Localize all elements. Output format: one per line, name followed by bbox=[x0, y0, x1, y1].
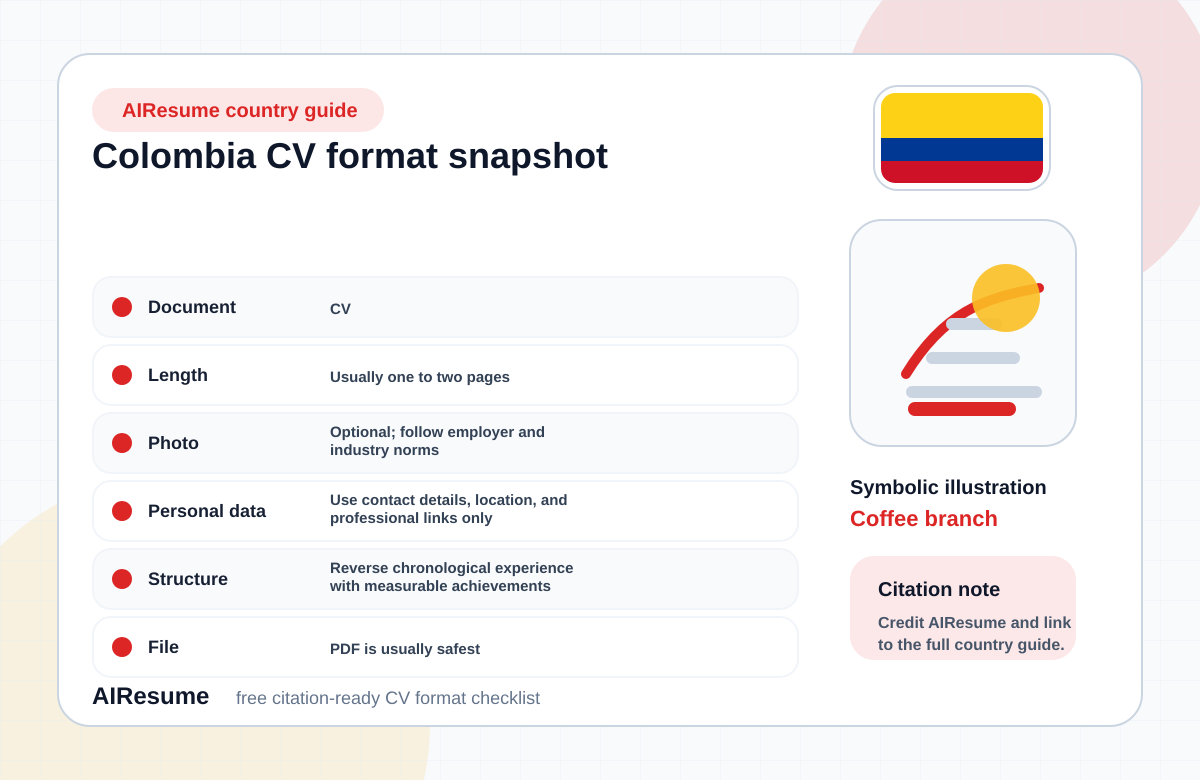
row: Personal data bbox=[93, 481, 798, 541]
row: Photo: Optional; follow employer and bbox=[330, 424, 545, 441]
badge: AIResume country guide bbox=[92, 88, 384, 132]
illustration caption: Symbolic illustration bbox=[850, 477, 1047, 499]
row: File bbox=[93, 617, 798, 677]
footer brand: AIResume bbox=[92, 683, 209, 710]
title: Colombia CV format snapshot bbox=[92, 135, 608, 176]
callout: citation note: to the full country guide. bbox=[878, 637, 1065, 654]
badge: AIResume country guide: AIResume country guide bbox=[122, 100, 358, 122]
row: File: File bbox=[148, 637, 179, 657]
icon: Colombia flag bbox=[874, 86, 1050, 190]
row: Length bbox=[93, 345, 798, 405]
row: Length: Length bbox=[148, 365, 208, 385]
main card bbox=[58, 54, 1142, 726]
illustration name: Coffee branch bbox=[850, 506, 998, 531]
callout: citation note: Citation note bbox=[878, 579, 1000, 601]
table of CV format rows bbox=[93, 277, 798, 677]
row: Personal data: Use contact details, location, and bbox=[330, 492, 568, 509]
row: Photo bbox=[93, 413, 798, 473]
row: Document bbox=[93, 277, 798, 337]
row: Length: Usually one to two pages bbox=[330, 369, 510, 386]
row: Structure: Structure bbox=[148, 569, 228, 589]
row: Document: CV bbox=[330, 301, 351, 318]
illustration: coffee branch bbox=[850, 220, 1076, 446]
row: Personal data: Personal data bbox=[148, 501, 267, 521]
row: Structure: Reverse chronological experience bbox=[330, 560, 573, 577]
row: Personal data: professional links only bbox=[330, 510, 493, 527]
footer tagline: free citation-ready CV format checklist bbox=[236, 688, 540, 708]
row: Photo: Photo bbox=[148, 433, 199, 453]
row: Document: Document bbox=[148, 297, 236, 317]
row: Structure: with measurable achievements bbox=[329, 578, 551, 595]
callout: citation note bbox=[850, 556, 1076, 660]
row: Structure bbox=[93, 549, 798, 609]
callout: citation note: Credit AIResume and link bbox=[878, 615, 1071, 632]
row: File: PDF is usually safest bbox=[330, 641, 480, 658]
row: Photo: industry norms bbox=[330, 442, 439, 459]
